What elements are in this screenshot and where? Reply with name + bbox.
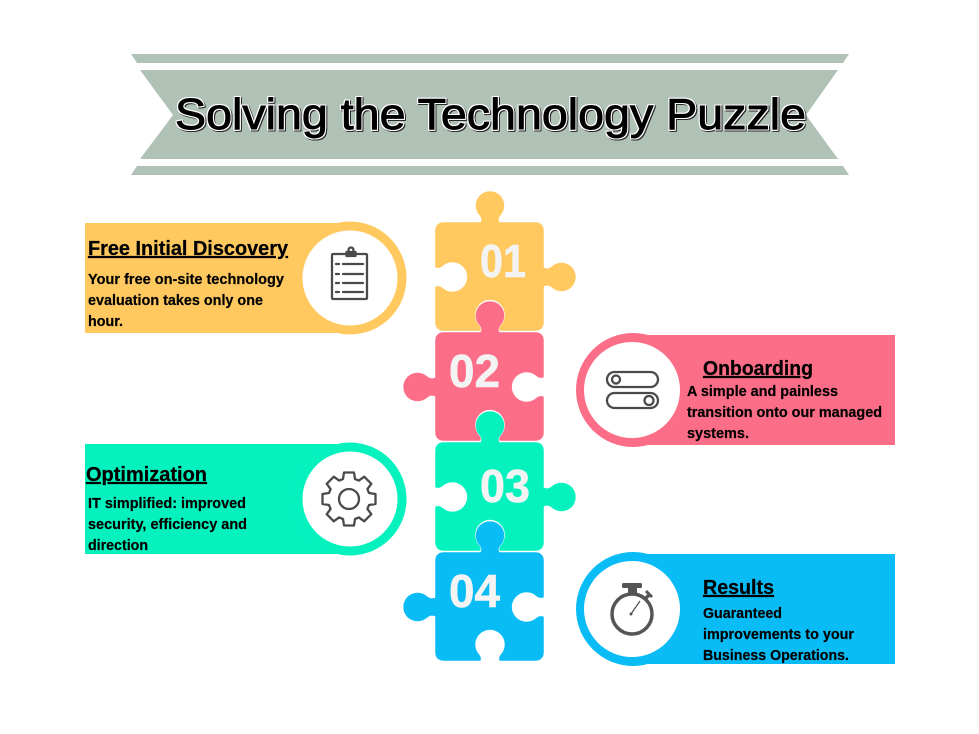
text block: results description: Business Operations. xyxy=(703,648,849,664)
heading: results: Results xyxy=(703,577,774,599)
text block: onboarding description xyxy=(687,384,882,442)
icon: toggle switches xyxy=(607,372,658,408)
text block: optimization description: security, efficiency and xyxy=(88,517,247,533)
number 03: 03 xyxy=(480,460,530,512)
puzzle piece 02 xyxy=(403,301,544,441)
number 04: 04 xyxy=(449,565,500,617)
panel: results xyxy=(576,552,895,666)
title: Solving the Technology Puzzle xyxy=(175,90,806,139)
text block: results description xyxy=(703,606,854,664)
number 02: 02 xyxy=(449,345,500,397)
text block: onboarding description: transition onto our managed xyxy=(687,405,882,421)
text block: results description: Guaranteed xyxy=(703,606,782,622)
panel: onboarding xyxy=(576,333,895,447)
text block: discovery description: evaluation takes only one xyxy=(88,293,263,309)
text block: discovery description xyxy=(88,272,284,330)
panel: optimization xyxy=(85,442,406,556)
text block: discovery description: Your free on-site technology xyxy=(88,272,284,288)
text block: onboarding description: systems. xyxy=(687,426,749,442)
puzzle piece 01 xyxy=(435,191,576,331)
heading: free initial discovery: Free Initial Discovery xyxy=(88,238,289,260)
heading: onboarding: Onboarding xyxy=(703,358,813,380)
heading: optimization: Optimization xyxy=(86,464,207,486)
text block: optimization description: IT simplified: improved xyxy=(88,496,246,512)
icon: gear xyxy=(322,472,376,526)
text block: optimization description: direction xyxy=(88,538,148,554)
text block: onboarding description: A simple and painless xyxy=(687,384,838,400)
panel: free initial discovery xyxy=(85,222,406,334)
icon: clipboard xyxy=(332,248,367,299)
icon: stopwatch xyxy=(612,583,652,634)
title banner xyxy=(131,54,849,175)
text block: discovery description: hour. xyxy=(88,314,123,330)
number 01: 01 xyxy=(480,235,526,287)
puzzle piece 03 xyxy=(435,411,576,551)
puzzle piece 04 xyxy=(403,521,544,661)
text block: optimization description xyxy=(88,496,247,554)
text block: results description: improvements to your xyxy=(703,627,854,643)
